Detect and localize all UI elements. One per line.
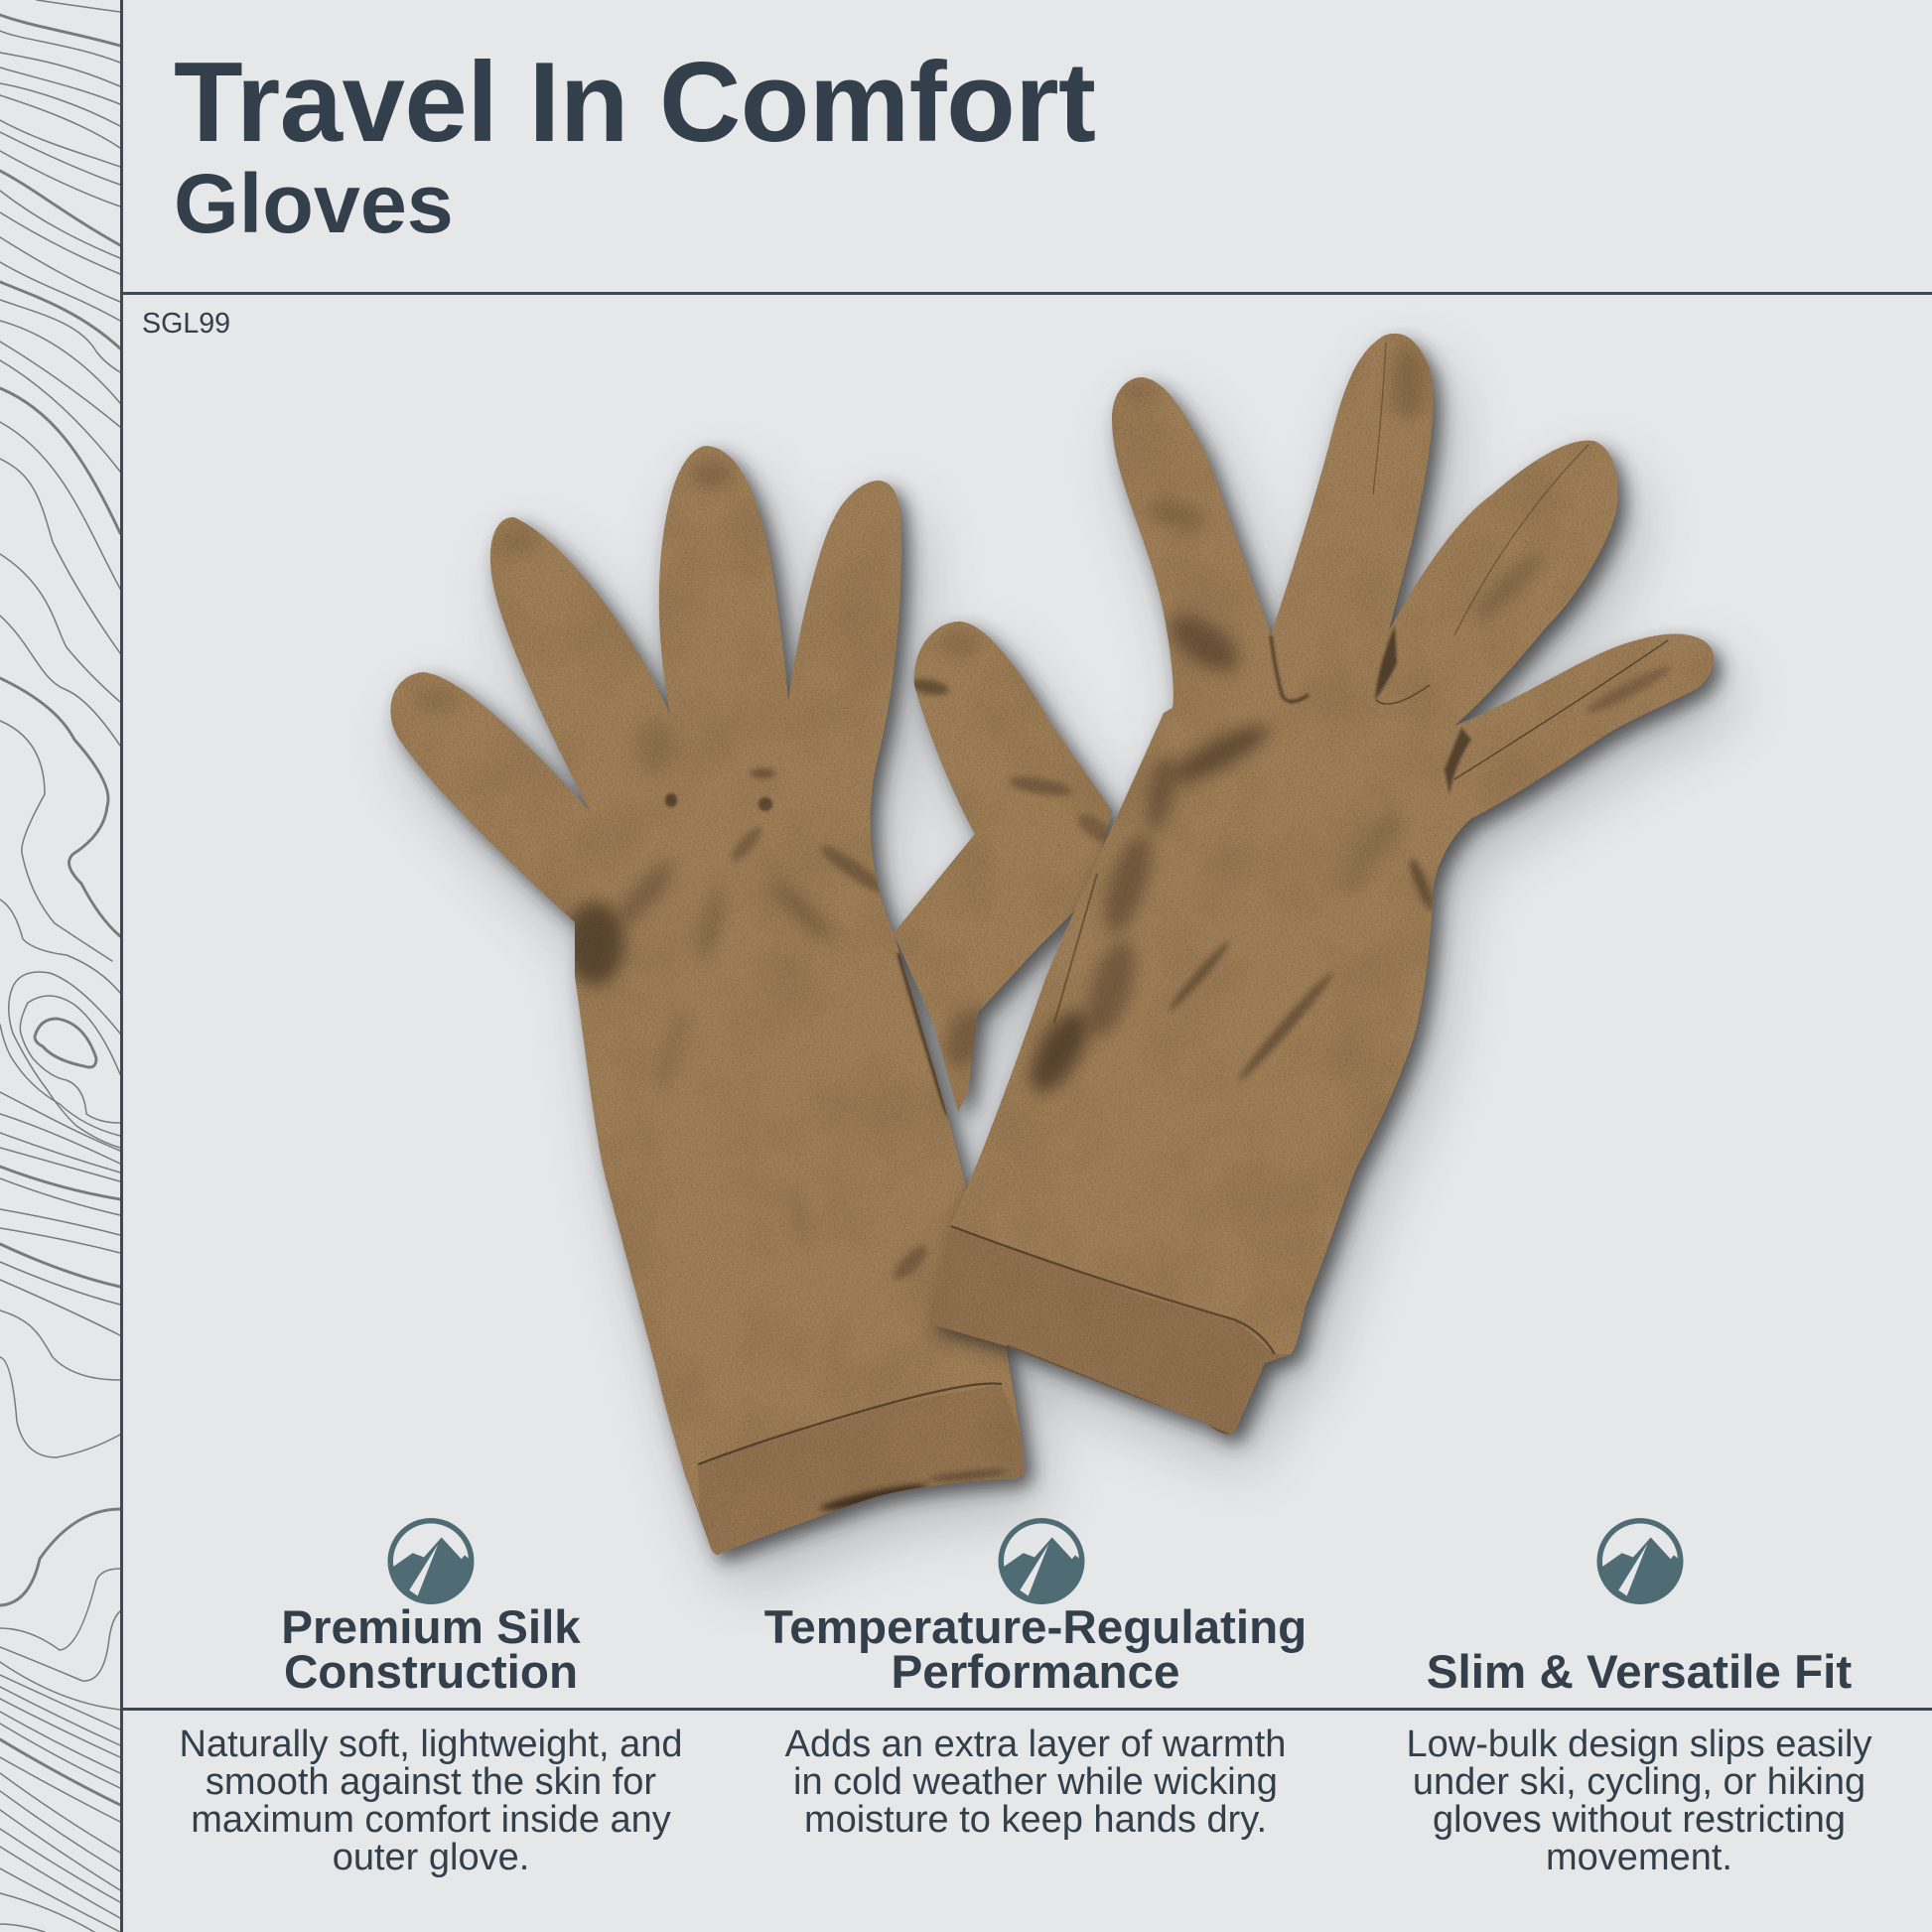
body text: premium silk: smooth against the skin for [206, 1761, 656, 1803]
body text: premium silk: Naturally soft, lightweight, and [180, 1724, 682, 1765]
icon: mountain badge 2 [999, 1518, 1084, 1604]
heading: premium silk: Premium Silk [281, 1601, 581, 1654]
heading: temperature regulating: Temperature-Regulating [764, 1601, 1307, 1654]
right glove [913, 318, 1737, 1449]
topographic contour strip [0, 0, 120, 1932]
right glove notch creases [1271, 625, 1471, 794]
body text: premium silk: maximum comfort inside any [191, 1799, 671, 1841]
body text: temperature regulating: in cold weather while wicking [793, 1761, 1278, 1803]
body text: slim fit: gloves without restricting [1433, 1799, 1846, 1841]
product code: SGL99 [142, 308, 230, 340]
icon: mountain badge 1 [387, 1518, 475, 1604]
gloves photo [377, 318, 1737, 1585]
heading: premium silk: Construction [284, 1646, 578, 1699]
heading: temperature regulating: Performance [892, 1646, 1179, 1699]
body text: temperature regulating: moisture to keep hands dry. [804, 1799, 1267, 1841]
body text: slim fit: under ski, cycling, or hiking [1413, 1761, 1865, 1803]
left glove finger holes [665, 793, 677, 807]
left glove thumb [894, 621, 1112, 1112]
right glove finger seams [1373, 343, 1386, 494]
icon: mountain badge 3 [1596, 1518, 1684, 1604]
heading: slim fit: Slim & Versatile Fit [1427, 1646, 1852, 1699]
body text: premium silk: outer glove. [333, 1837, 529, 1878]
right glove cuff [928, 1227, 1290, 1434]
body text: slim fit: movement. [1546, 1837, 1732, 1878]
left glove cuff [698, 1384, 1033, 1564]
left glove [377, 437, 1033, 1569]
body text: slim fit: Low-bulk design slips easily [1407, 1724, 1871, 1765]
right glove shadow [936, 343, 1722, 1444]
title: Travel In Comfort [174, 40, 1096, 166]
subtitle: Gloves [174, 157, 454, 250]
body text: temperature regulating: Adds an extra layer of warmth [785, 1724, 1286, 1765]
soft cast shadows [398, 363, 1731, 1585]
left glove side seam [898, 953, 953, 1115]
